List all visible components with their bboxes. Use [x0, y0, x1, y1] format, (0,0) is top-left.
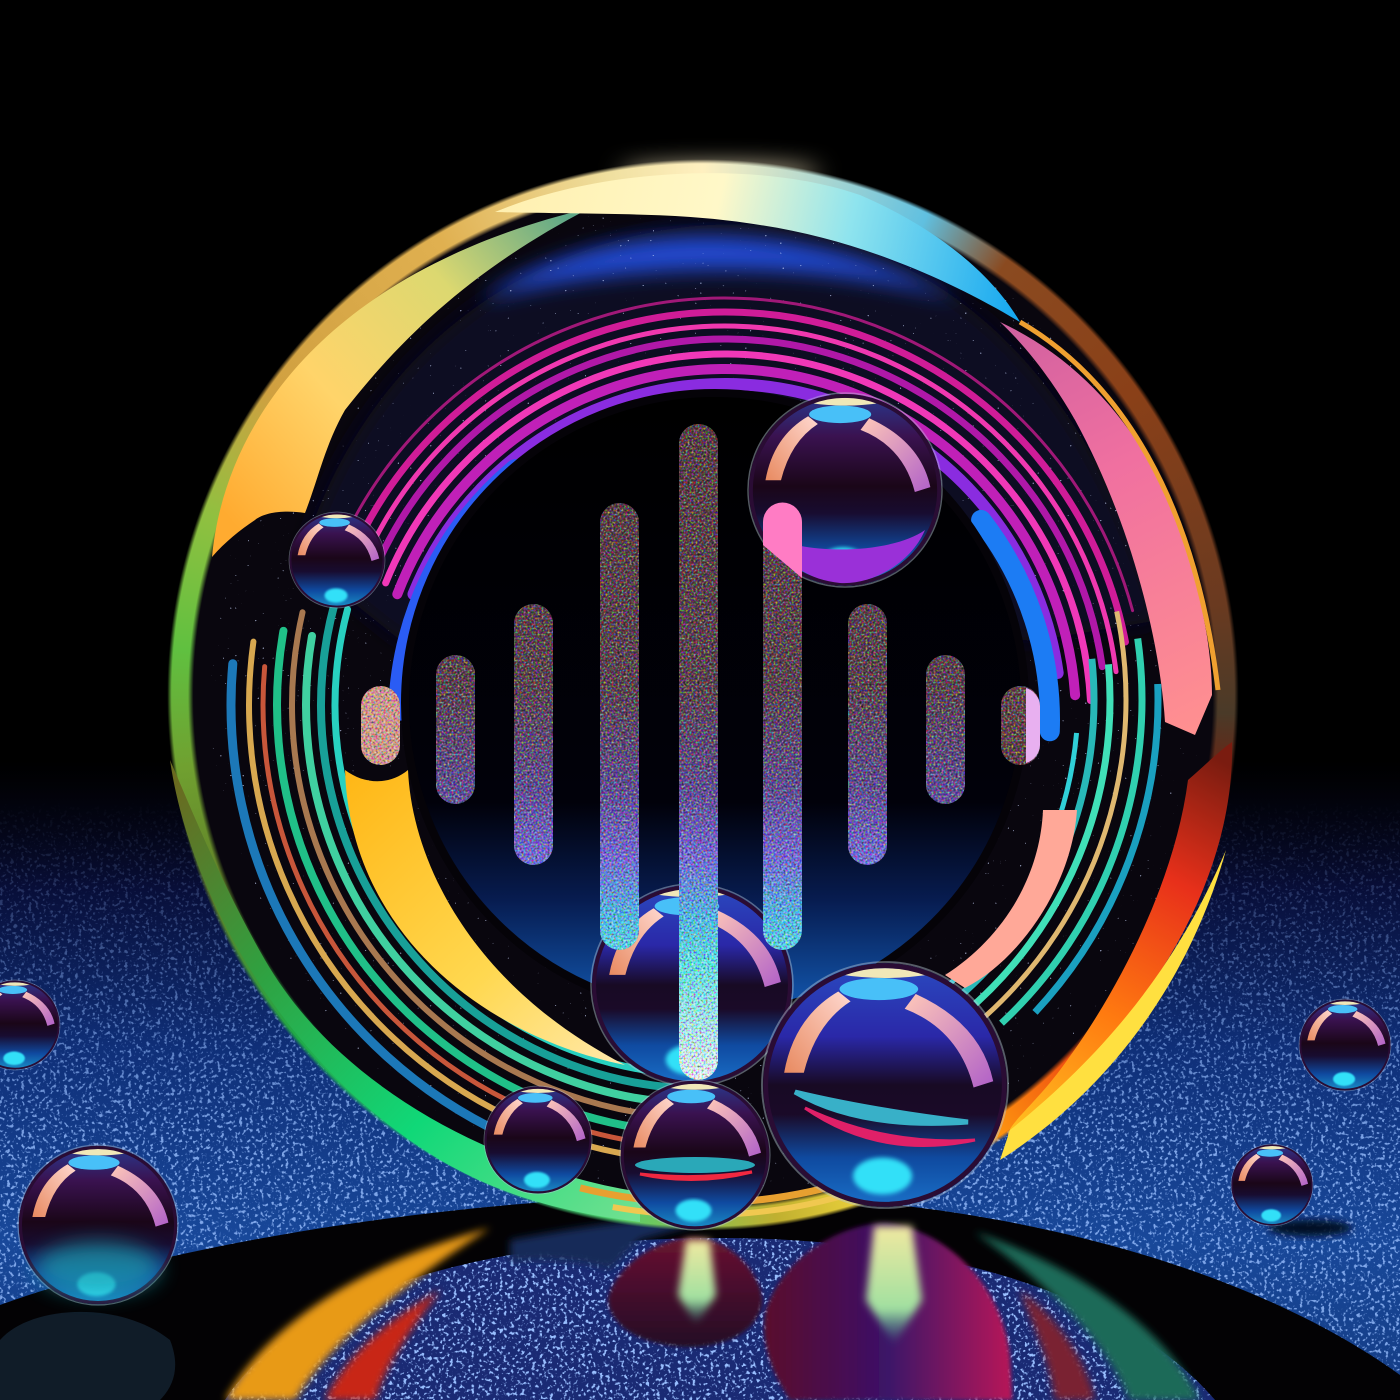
iridescent rim — [158, 150, 1248, 1240]
bar 6 — [763, 503, 802, 950]
ring body — [171, 163, 1235, 1227]
bar 7 — [848, 604, 887, 865]
pink crescent right — [1000, 322, 1212, 735]
pool speckled centre — [220, 1235, 1220, 1400]
bright half of last bar — [1026, 688, 1040, 763]
bubble small bottom — [620, 1080, 770, 1230]
green band lower left — [170, 760, 640, 1222]
glow above the ring — [620, 166, 820, 182]
yellow band bottom right — [1000, 850, 1226, 1160]
bar 8 — [926, 655, 965, 804]
yellow crescent upper left — [212, 208, 590, 557]
bubble centre — [591, 884, 793, 1086]
bar 3 — [514, 604, 553, 865]
bubble lower left of centre — [484, 1086, 592, 1194]
ring — [168, 160, 1238, 1230]
blue top sheen — [480, 236, 960, 300]
bubble far left edge — [0, 980, 60, 1070]
reflection: large sphere — [764, 1223, 1012, 1400]
bar 9 — [1001, 686, 1040, 765]
bar 5 — [679, 424, 718, 1080]
bar 1 — [361, 686, 400, 765]
floor shadow under small bubble — [1268, 1220, 1352, 1236]
rainbow reflection right — [975, 1232, 1200, 1400]
bubble top right on ring — [748, 393, 942, 587]
dark reflective pool — [0, 1195, 1400, 1400]
bright bar tip over bubble — [763, 503, 802, 578]
rainbow reflection left red — [325, 1290, 440, 1400]
red stripe — [640, 1172, 752, 1180]
teal band — [635, 1157, 755, 1173]
sparkles — [200, 190, 1210, 1200]
magenta swirl — [164, 159, 1286, 1281]
floor — [0, 760, 1400, 1400]
bar 4 — [600, 503, 639, 950]
teal tint — [36, 1242, 160, 1294]
yellow line by pink band — [1020, 322, 1218, 690]
upper purple interior — [300, 224, 1160, 640]
reflection highlights — [678, 1240, 716, 1325]
bubble lower right — [1231, 1144, 1313, 1226]
inner pink band — [945, 810, 1077, 988]
bubble far left bottom — [18, 1145, 178, 1305]
central hole — [405, 393, 1025, 1013]
bubble large bottom right — [762, 962, 1008, 1208]
purple pool — [770, 530, 925, 583]
inner yellow band — [345, 770, 625, 1065]
bubble far right — [1299, 999, 1391, 1091]
red stripe — [805, 1108, 975, 1146]
reflection: small sphere — [608, 1237, 762, 1347]
right side green and teal swirl — [195, 195, 1205, 1205]
sound wave bars — [361, 424, 1040, 1080]
rainbow reflection left — [225, 1228, 490, 1400]
bar 2 — [436, 655, 475, 804]
top white and cyan band — [495, 173, 1020, 322]
teal band — [795, 1092, 968, 1123]
red orange band lower right — [1008, 742, 1232, 1140]
bubble left on ring — [289, 512, 385, 608]
reflection highlight large — [866, 1226, 922, 1345]
rainbow reflection right red — [1020, 1290, 1095, 1400]
bottom-left reflection — [0, 1312, 175, 1400]
dark band under centre — [510, 1215, 730, 1270]
